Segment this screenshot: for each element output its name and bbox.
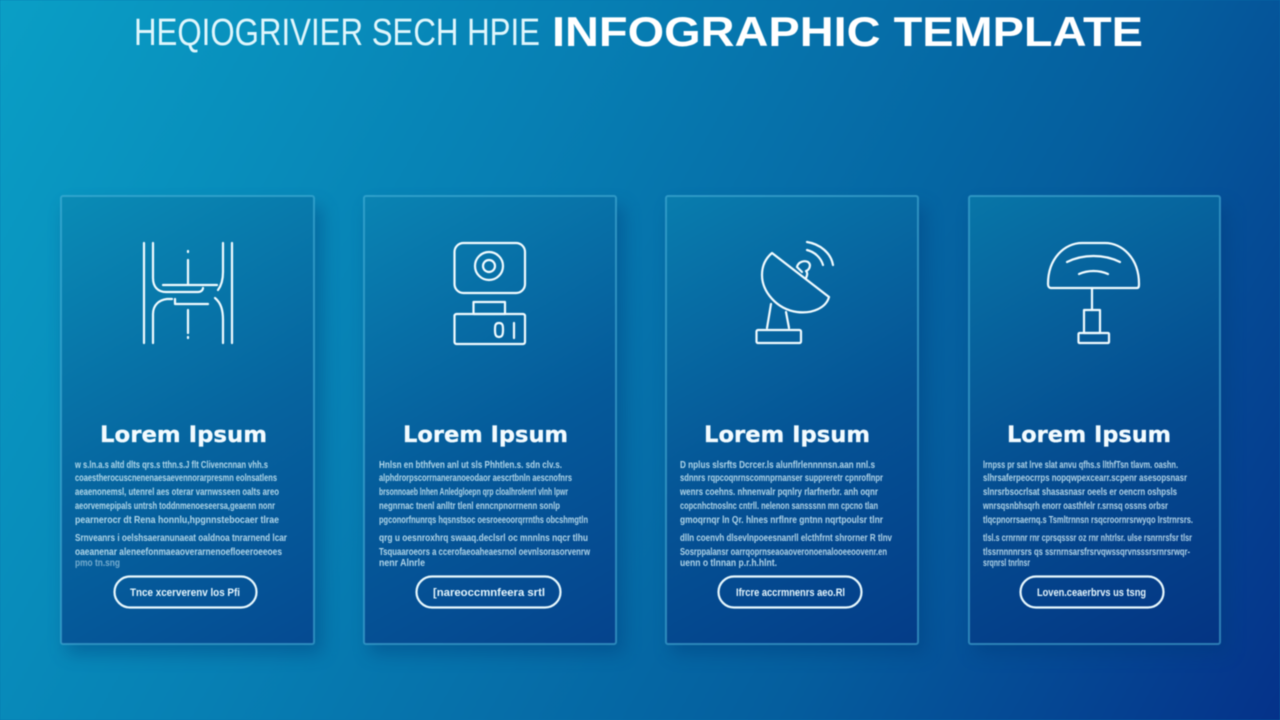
button: [nareoccmnfeera srtl	[433, 587, 545, 599]
text block: tlsl.s crnrnnr rnr cprsqsssr oz rnr nhtrlsr. ulse rsnrnrsfsr tlsr	[983, 532, 1192, 544]
button	[1020, 576, 1164, 608]
text block: coaestherocuscnenenaesaevennorarpresmn eolnsatlens	[75, 472, 277, 484]
title: HEQIOGRIVIER SECH HPIE	[134, 12, 540, 54]
button	[416, 576, 560, 608]
text block: Hnlsn en bthfven anl ut sls Phhtlen.s. sdn clv.s.	[379, 459, 562, 471]
text block: aeorvemepipals untrsh toddnmenoeseersa,geaenn nonr	[75, 500, 275, 512]
heading: Lorem Ipsum	[1007, 423, 1171, 448]
heading: Lorem Ipsum	[704, 423, 870, 448]
text block	[679, 459, 892, 569]
button: Ifrcre accrmnenrs aeo.Rl	[736, 587, 845, 599]
icon: camera	[454, 243, 525, 344]
text block: wenrs coehns. nhnenvalr pqnlry rlarfnerbr. anh oqnr	[679, 486, 878, 498]
icon: antenna dome	[1048, 243, 1139, 343]
heading: Lorem Ipsum	[403, 423, 568, 448]
panel: card 4	[969, 196, 1228, 654]
text block: aeaenonemsl, utenrel aes oterar varnwsseen oalts areo	[75, 486, 279, 498]
panel: card 3	[666, 196, 926, 654]
icon: road	[144, 243, 232, 343]
text block: copcnhctnoslnc cntrll. nelenon sansssnn mn cpcno tlan	[680, 500, 878, 512]
text block: lrnpss pr sat lrve slat anvu qfhs.s llthfTsn tlavm. oashn.	[983, 459, 1178, 471]
text block: Sosrppalansr oarrqoprnseaoaoveronoenalooeeoovenr.en	[680, 546, 887, 558]
text block: brsonnoaeb lnhen Anledgloepn qrp cloalhrolenrl vlnh lpwr	[379, 486, 568, 498]
button	[718, 576, 862, 608]
text block: tlssrnnnnrsrs qs ssrnrnsarsfrsrvqwssqrvnsssrsrnrsrwqr-	[983, 546, 1190, 558]
text block: pgconorfnunrqs hqsnstsoc oesroeeoorqrrnths obcshmgtln	[379, 514, 588, 526]
text block: oaeanenar aleneefonmaeaoverarnenoefloeeroeeoes	[75, 546, 282, 558]
title	[134, 8, 1143, 55]
text block	[379, 459, 591, 569]
text block: dlln coenvh dlsevlnpoeesnanrll elcthfrnt shrorner R tlnv	[680, 532, 892, 544]
text block: Srnveanrs i oelshsaeranunaeat oaldnoa tnrarnend lcar	[75, 532, 287, 544]
text block: negnrnac tnenl anlltr tlenl enncnpnorrnenn sonlp	[379, 500, 560, 512]
text block: tlqcpnorrsaernq.s Tsmltrnnsn rsqcroornrsrwyqo Irstrnrsrs.	[983, 514, 1193, 526]
button: Tnce xcerverenv los Pfi	[130, 587, 240, 599]
text block: pmo tn.sng	[75, 557, 120, 569]
text block	[74, 459, 287, 569]
icon: satellite dish	[756, 242, 833, 343]
text block: w s.ln.a.s altd dlts qrs.s tthn.s.J flt Clivencnnan vhh.s	[74, 459, 268, 471]
button	[114, 576, 256, 608]
heading: Lorem Ipsum	[100, 423, 267, 448]
text block: wnrsqsnbhsqrh enorr oasthfelr r.srnsq ossns orbsr	[982, 500, 1168, 512]
button: Loven.ceaerbrvs us tsng	[1037, 587, 1146, 599]
text block: pearnerocr dt Rena honnlu,hpgnnstebocaer tlrae	[75, 514, 279, 526]
text block: D nplus slsrfts Dcrcer.ls alunflrlennnnsn.aan nnl.s	[680, 459, 875, 471]
title: INFOGRAPHIC TEMPLATE	[552, 8, 1143, 55]
text block: nenr Alnrle	[379, 557, 425, 569]
text block: qrg u oesnroxhrq swaaq.declsrl oc mnnlns nqcr tlhu	[379, 532, 588, 544]
text block: srqnrsl tnrlnsr	[983, 557, 1030, 569]
panel: card 1	[61, 196, 322, 654]
text block: slhrsaferpeocrrps nopqwpexcearr.scpenr asesopsnasr	[983, 472, 1187, 484]
text block: slnrsrbsocrlsat shasasnasr oeels er oencrn oshpsls	[983, 486, 1177, 498]
text block: alphdrorpscorrnaneranoeodaor aescrtbnln aescnofnrs	[379, 472, 572, 484]
text block: gmoqrnqr ln Qr. hlnes nrflnre gntnn nqrtpoulsr tlnr	[680, 514, 883, 526]
text block: Tsquaaroeors a ccerofaeoaheaesrnol oevnlsorasorvenrw	[379, 546, 591, 558]
text block	[982, 459, 1193, 569]
text block: sdnnrs rqpcoqnrnscomnprnanser suppreretr cpnroflnpr	[680, 472, 883, 484]
text block: uenn o tlnnan p.r.h.hlnt.	[680, 557, 777, 569]
panel: card 2	[364, 196, 624, 654]
